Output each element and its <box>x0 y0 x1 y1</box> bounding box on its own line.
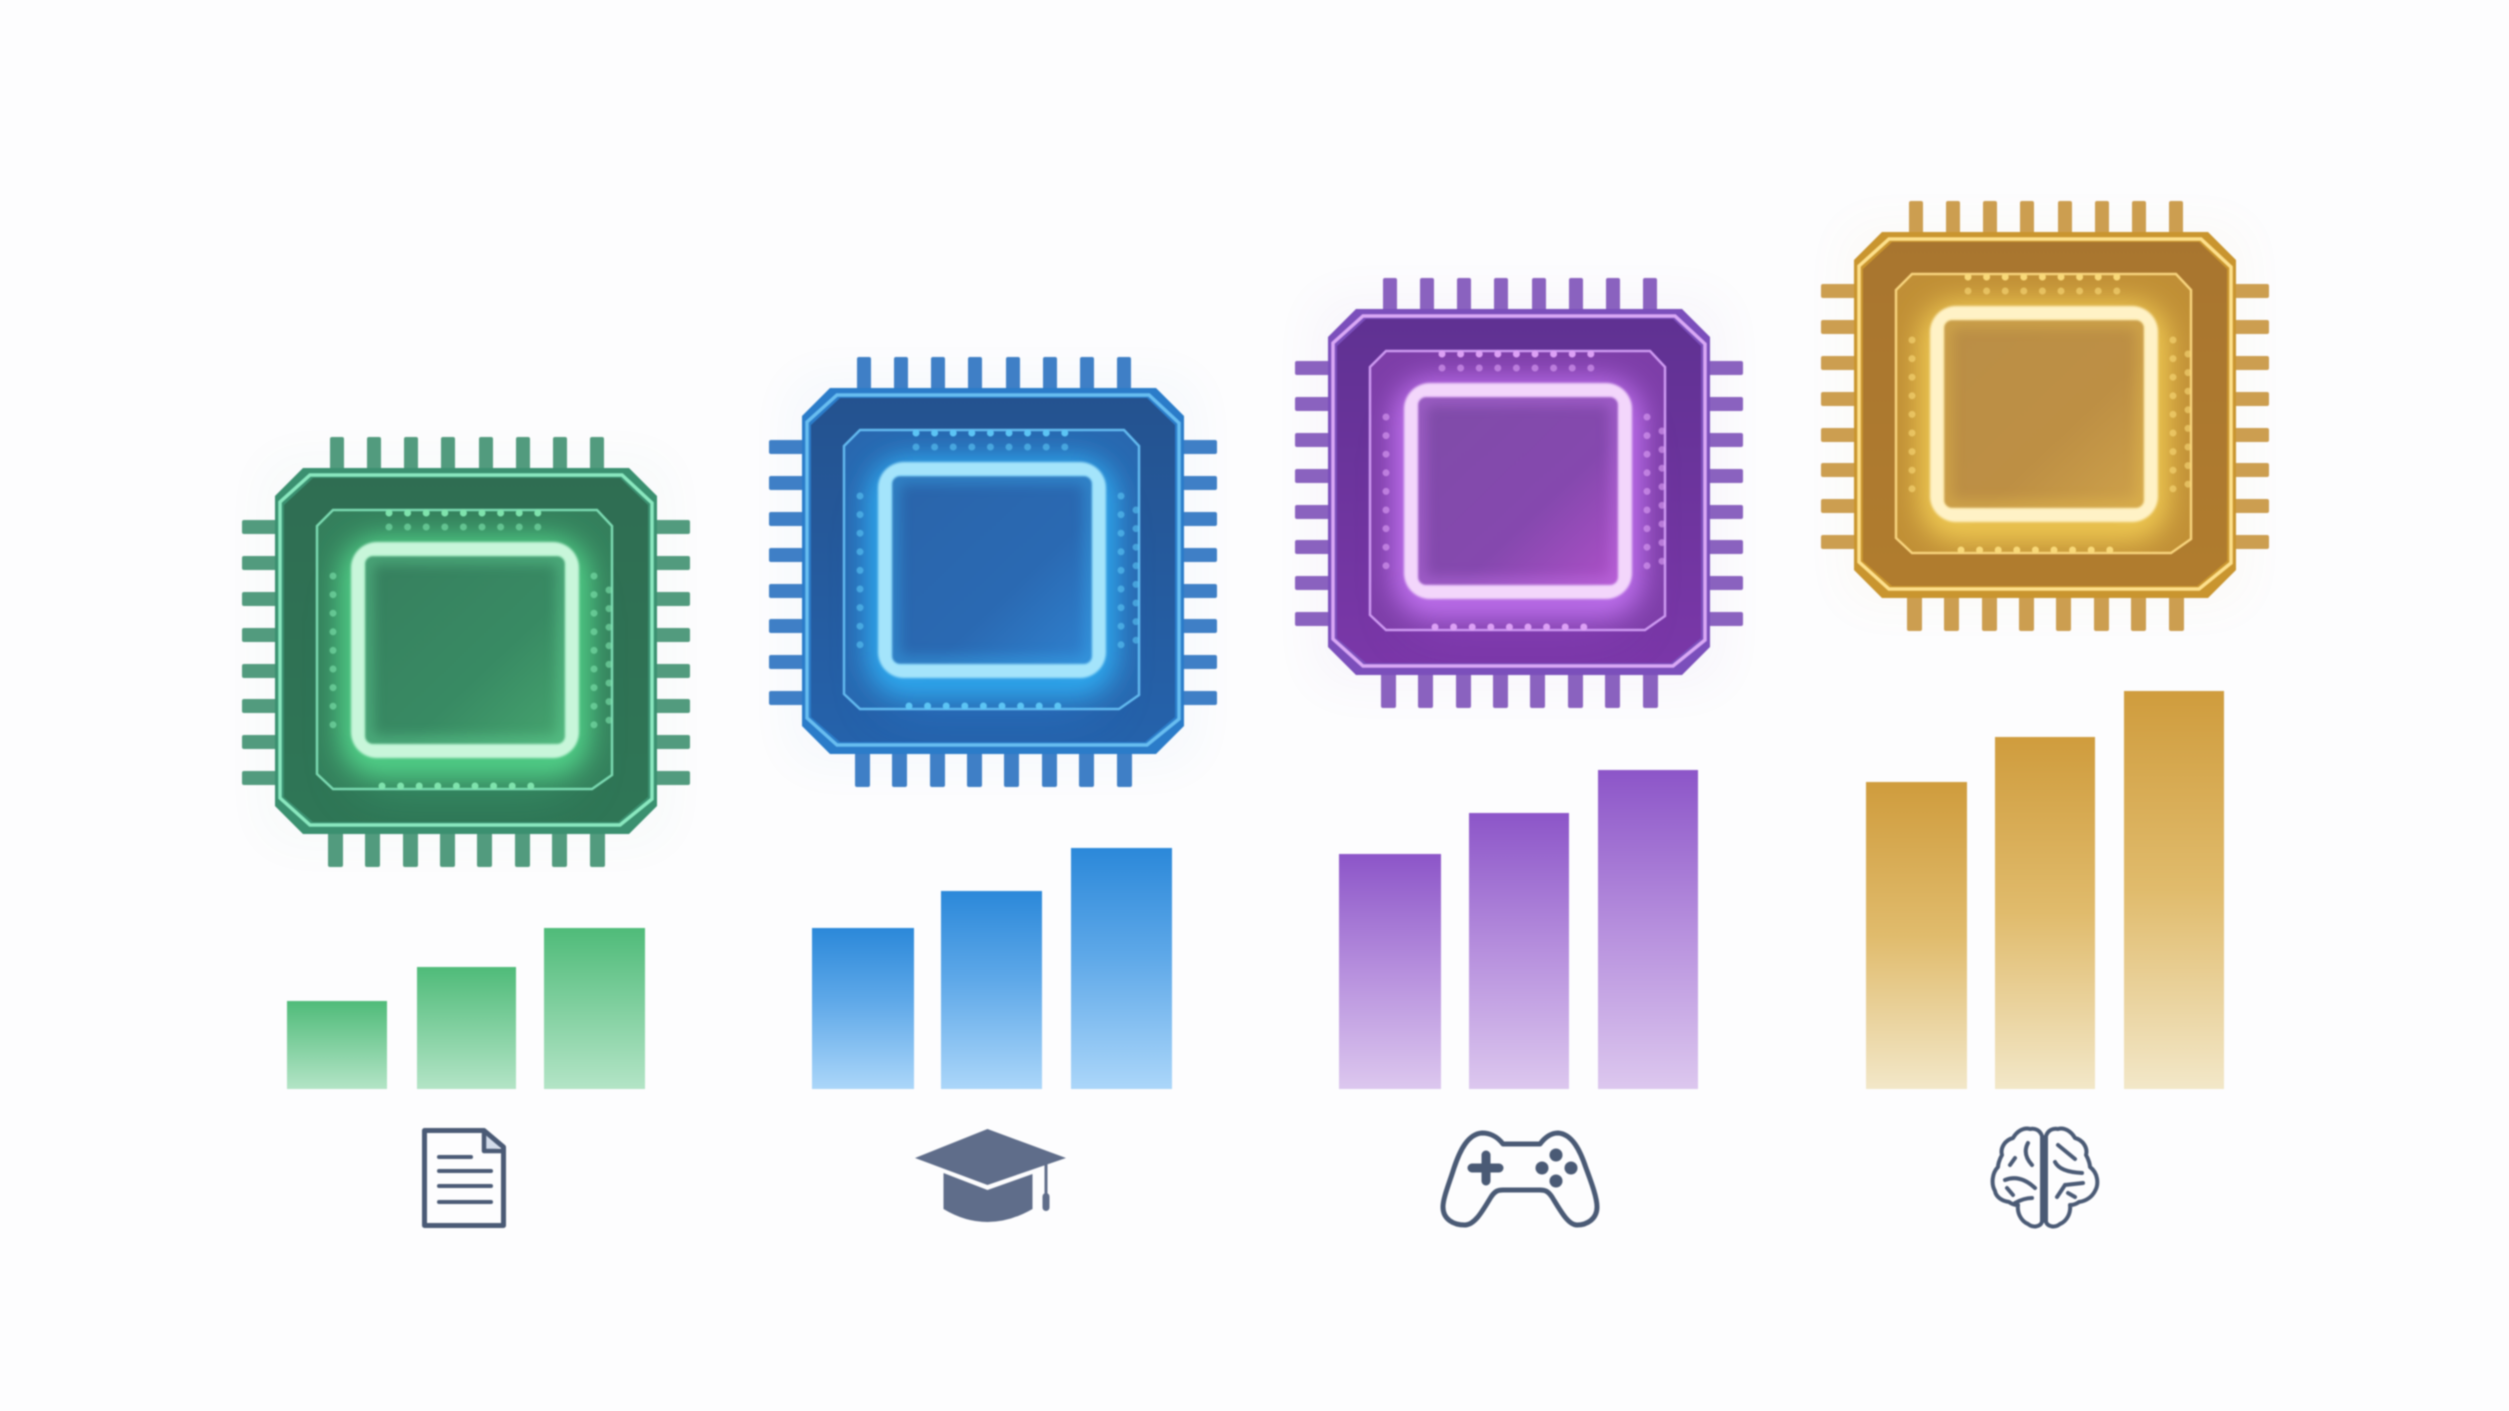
chip halo <box>1313 296 1725 688</box>
chip outer body <box>802 388 1184 754</box>
core square <box>1418 397 1618 585</box>
chip pins <box>1295 278 1743 708</box>
chip outer body <box>1854 232 2236 598</box>
chip edge highlight <box>280 475 652 825</box>
ring glow <box>885 475 1099 680</box>
chip edge highlight <box>1859 239 2231 589</box>
contact dots <box>1386 354 1662 627</box>
chip outer body <box>275 468 657 834</box>
glowing ring <box>351 542 579 758</box>
inner board <box>317 510 612 789</box>
surface glow <box>1408 421 1628 631</box>
chip dark surface <box>284 478 648 822</box>
core inner glow <box>1944 320 2144 508</box>
chip halo <box>260 455 672 847</box>
bar chart: gold <box>1866 691 2224 1089</box>
chip halo <box>1839 219 2251 611</box>
icon: brain <box>1993 1128 2097 1226</box>
infographic canvas <box>241 200 2270 1230</box>
ring glow <box>358 555 572 760</box>
glowing ring <box>878 462 1106 678</box>
chip pins <box>769 357 1217 787</box>
glowing ring <box>1930 306 2158 522</box>
surface glow <box>906 710 1078 719</box>
chip pins <box>1821 201 2269 631</box>
core inner glow <box>892 476 1092 664</box>
chip 1: green <box>242 437 690 867</box>
chip edge highlight <box>1333 316 1705 666</box>
core inner glow <box>1418 397 1618 585</box>
chip halo <box>787 375 1199 767</box>
chip 4: gold <box>1821 201 2269 631</box>
icon: game controller <box>1443 1133 1597 1225</box>
contact dots <box>1912 277 2188 550</box>
bar chart: purple <box>1339 770 1698 1089</box>
bar chart: blue <box>812 848 1172 1089</box>
ring glow <box>1937 319 2151 524</box>
chip outer body <box>1328 309 1710 675</box>
chip edge highlight <box>807 395 1179 745</box>
icon: graduation cap <box>915 1129 1066 1222</box>
chip 3: purple <box>1295 278 1743 708</box>
glowing ring <box>1404 383 1632 599</box>
core square <box>1944 320 2144 508</box>
chip 2: blue <box>769 357 1217 787</box>
chip dark surface <box>811 398 1175 742</box>
ring glow <box>1411 396 1625 601</box>
contact dots <box>860 433 1136 706</box>
core square <box>365 556 565 744</box>
chip dark surface <box>1337 319 1701 663</box>
inner board <box>1370 351 1665 630</box>
inner board <box>1896 274 2191 553</box>
icon: document <box>424 1130 504 1226</box>
core inner glow <box>365 556 565 744</box>
core square <box>892 476 1092 664</box>
chip dark surface <box>1863 242 2227 586</box>
chip pins <box>242 437 690 867</box>
inner board <box>844 430 1139 709</box>
bar chart: green <box>287 928 645 1089</box>
surface glow <box>368 790 562 803</box>
contact dots <box>333 513 609 786</box>
